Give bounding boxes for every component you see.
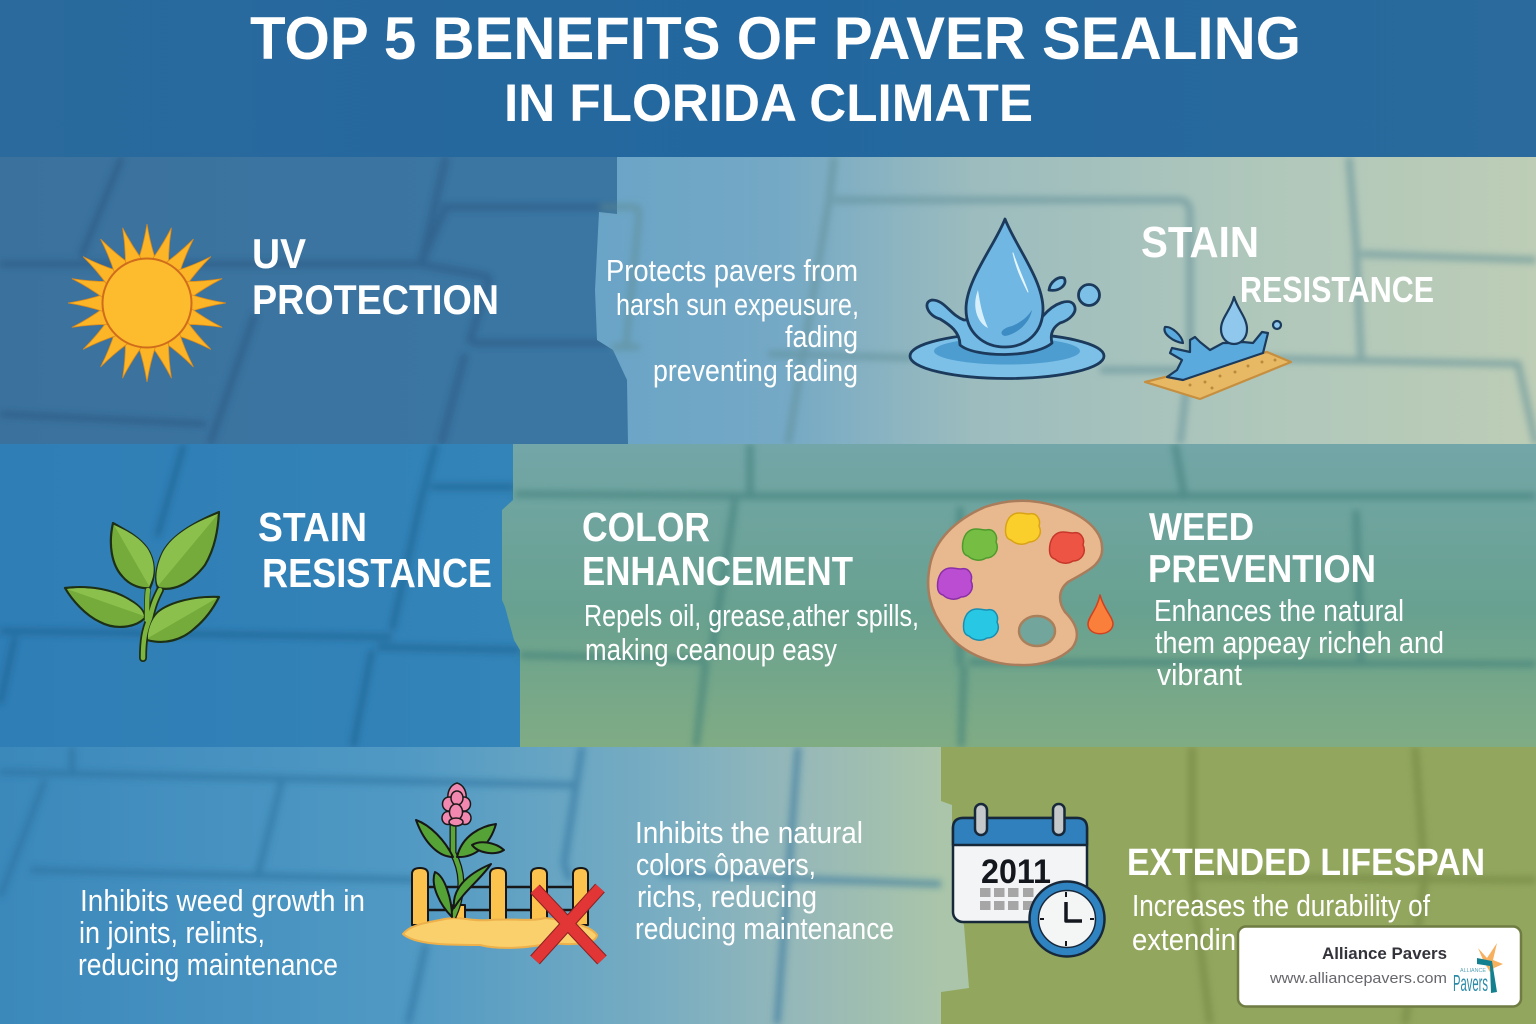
panel: row 1 right (stain resistance) background [595, 157, 1536, 444]
text block: extended lifespan description: extending their service life [1132, 922, 1450, 957]
heading: stain resistance (top right) [1141, 218, 1434, 310]
icon: Alliance Pavers logo: ALLIANCE [1460, 968, 1487, 974]
heading: UV protection: PROTECTION [252, 276, 499, 323]
panel: row 3 right background [941, 747, 1536, 1024]
title: IN FLORIDA CLIMATE [504, 74, 1033, 133]
text block: UV protection description: harsh sun expeusure, [616, 287, 859, 322]
heading: UV protection [252, 230, 499, 323]
text block: row 3 left description [78, 883, 365, 982]
heading: stain resistance (row 2): RESISTANCE [262, 550, 492, 596]
icon: red cross [535, 888, 602, 960]
text block: row 3 middle description: richs, reducing [637, 879, 817, 914]
header band [0, 0, 1536, 157]
heading: extended lifespan: EXTENDED LIFESPAN [1127, 842, 1485, 884]
panel: row 2 right background [502, 444, 1536, 747]
icon: paint palette [928, 501, 1113, 665]
text block: row 3 left description: reducing maintenance [78, 947, 338, 982]
text block: UV protection description: Protects pavers from [606, 253, 858, 288]
text block: row 3 middle description: colors ôpavers, [636, 847, 816, 882]
badge: Alliance Pavers: www.alliancepavers.com [1269, 970, 1447, 987]
heading: stain resistance (top right): RESISTANCE [1240, 269, 1434, 310]
heading: stain resistance (top right): STAIN [1141, 218, 1259, 267]
heading: color enhancement: ENHANCEMENT [582, 548, 853, 594]
icon: calendar and clock: 2011 [981, 853, 1051, 891]
icon: Alliance Pavers logo: Pavers [1453, 970, 1488, 996]
icon: Alliance Pavers logo [1453, 943, 1503, 996]
heading: color enhancement: COLOR [582, 504, 710, 550]
icon: sun [68, 224, 226, 382]
text block: color description: Repels oil, grease,ather spills, [584, 598, 919, 633]
text block: row 3 middle description: reducing maintenance [635, 911, 894, 946]
icon: water drop splash [910, 219, 1104, 378]
text block: weed description: Enhances the natural [1154, 593, 1404, 628]
badge: Alliance Pavers: Alliance Pavers [1322, 945, 1447, 963]
title: TOP 5 BENEFITS OF PAVER SEALING [250, 5, 1301, 72]
text block: weed description: vibrant [1157, 657, 1242, 692]
text block: row 3 left description: in joints, relints, [79, 915, 265, 950]
text block: color description [584, 598, 919, 667]
text block: extended lifespan description: Increases the durability of [1132, 888, 1430, 923]
icon: calendar and clock [953, 804, 1104, 956]
title [250, 5, 1301, 133]
panel: row 1 left (UV protection) background [0, 157, 640, 444]
text block: color description: making ceanoup easy [585, 632, 837, 667]
text block: weed description: them appeay richeh and [1155, 625, 1444, 660]
text block: extended lifespan description [1132, 888, 1450, 957]
text block: row 3 middle description: Inhibits the natural [635, 815, 863, 850]
text block: UV protection description [606, 253, 859, 388]
heading: weed prevention: PREVENTION [1148, 548, 1376, 591]
heading: stain resistance (row 2) [258, 504, 492, 596]
text block: weed description [1154, 593, 1444, 692]
heading: stain resistance (row 2): STAIN [258, 504, 367, 550]
text block: UV protection description: fading [785, 319, 858, 354]
heading: weed prevention [1148, 506, 1376, 591]
icon: splash on paver [1145, 297, 1291, 399]
heading: color enhancement [582, 504, 853, 594]
badge: Alliance Pavers [1238, 926, 1521, 1006]
panel: row 3 left background [0, 747, 975, 1024]
panel: row 2 left background [0, 444, 530, 747]
text block: row 3 left description: Inhibits weed growth in [80, 883, 365, 918]
icon: weed and fence with cross [403, 783, 597, 948]
heading: weed prevention: WEED [1149, 506, 1254, 549]
icon: leaves [65, 512, 219, 658]
text block: row 3 middle description [635, 815, 894, 946]
heading: UV protection: UV [252, 230, 306, 277]
text block: UV protection description: preventing fading [653, 353, 858, 388]
